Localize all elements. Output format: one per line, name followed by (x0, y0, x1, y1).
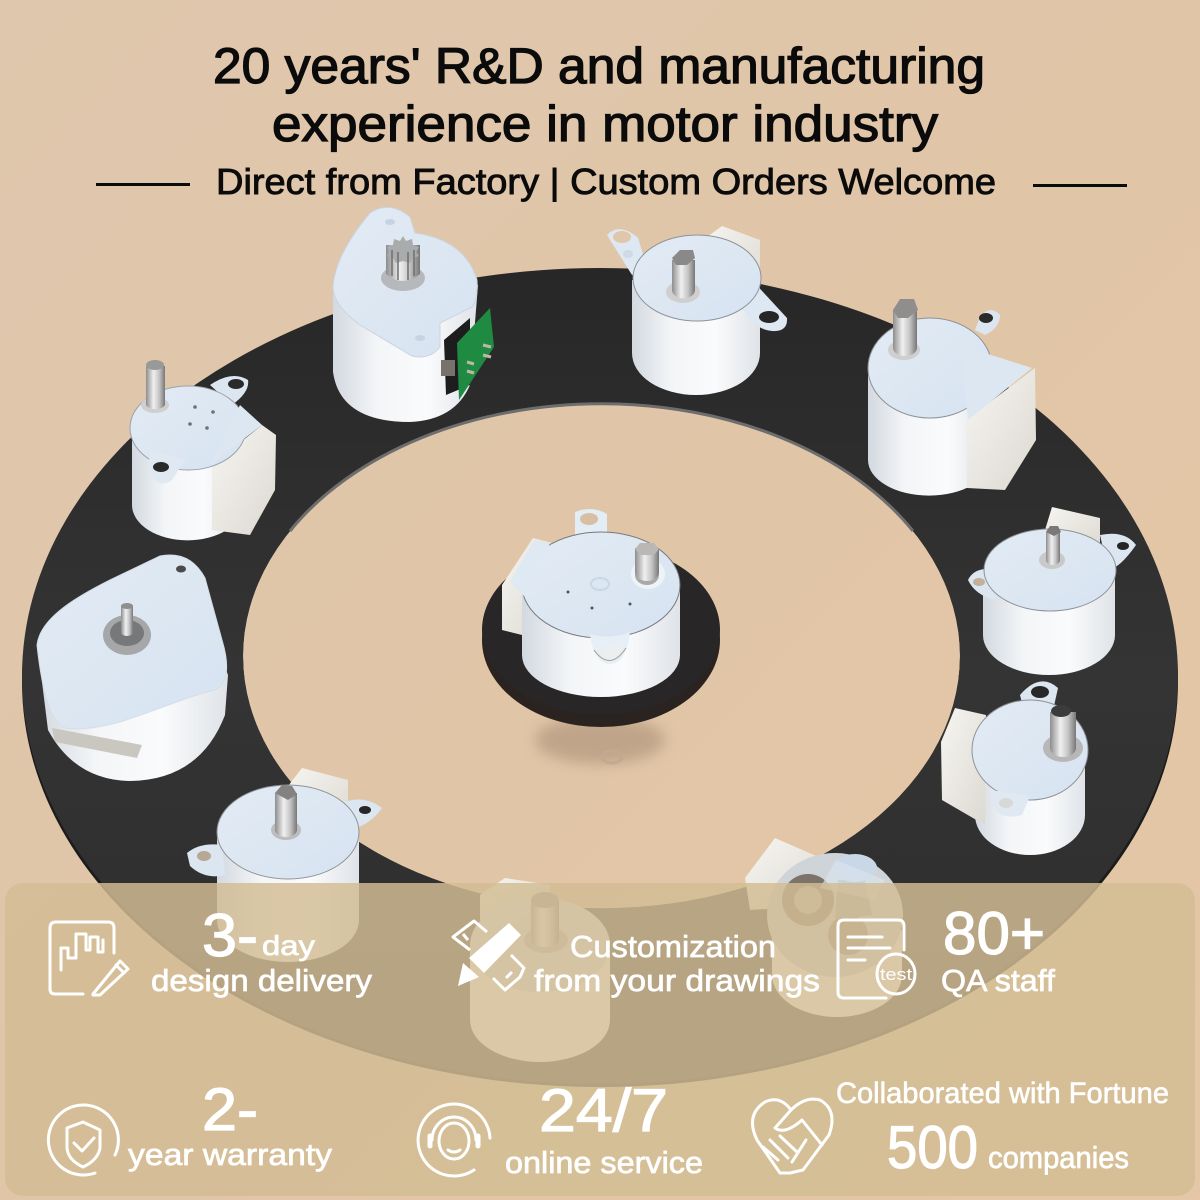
icon: pencil and rulers (453, 921, 524, 990)
motor: lower left (187, 768, 382, 962)
stat: warranty: year warranty (128, 1137, 333, 1172)
title: experience in motor industry (272, 96, 938, 152)
motor: right (968, 507, 1136, 675)
motor: top (607, 226, 787, 395)
stat: QA staff: QA staff (941, 963, 1055, 998)
stat: Fortune 500: Collaborated with Fortune (836, 1077, 1169, 1110)
stat: online service (418, 1077, 703, 1180)
motor: left (130, 360, 276, 540)
stat: customization: Customization (570, 929, 776, 964)
motor: exposed gearbox (745, 838, 903, 1017)
icon: test document: test (880, 965, 912, 984)
motor: bottom center (470, 878, 610, 1062)
stat: Fortune 500 (752, 1077, 1169, 1181)
icon: test document (838, 920, 915, 998)
title (213, 38, 985, 152)
stat: design delivery: day (262, 930, 315, 961)
stat: customization (453, 921, 820, 998)
stat: warranty: 2- (202, 1076, 258, 1143)
black ring platform (22, 268, 1178, 1087)
stat: design delivery: design delivery (151, 963, 373, 998)
icon: handshake heart (752, 1099, 832, 1173)
motor: upper right (868, 299, 1036, 496)
stat: design delivery (50, 902, 373, 998)
translucent stats panel (5, 883, 1195, 1196)
icon: shield in circle (48, 1105, 118, 1175)
stat: Fortune 500: 500 (887, 1114, 978, 1181)
stat: QA staff (838, 900, 1055, 998)
subtitle with side rules: Direct from Factory | Custom Orders Welcome (216, 161, 996, 202)
stat: QA staff: 80+ (943, 900, 1045, 967)
icon: drawing sheet and pencil (50, 922, 128, 995)
icon: headset agent (418, 1104, 490, 1176)
stat: Fortune 500: companies (988, 1140, 1129, 1175)
center motor (502, 509, 680, 697)
stat: customization: from your drawings (534, 963, 820, 998)
title: 20 years' R&D and manufacturing (213, 38, 985, 94)
stat: design delivery: 3- (202, 902, 258, 969)
motor: gear pinion with green PCB (333, 207, 494, 422)
stat: online service: 24/7 (539, 1077, 668, 1144)
stat: warranty (48, 1076, 333, 1175)
motor: lower right (941, 681, 1088, 855)
center turntable and shadow (482, 545, 720, 764)
motor: large teardrop (37, 555, 228, 781)
stat: online service: online service (505, 1145, 703, 1180)
